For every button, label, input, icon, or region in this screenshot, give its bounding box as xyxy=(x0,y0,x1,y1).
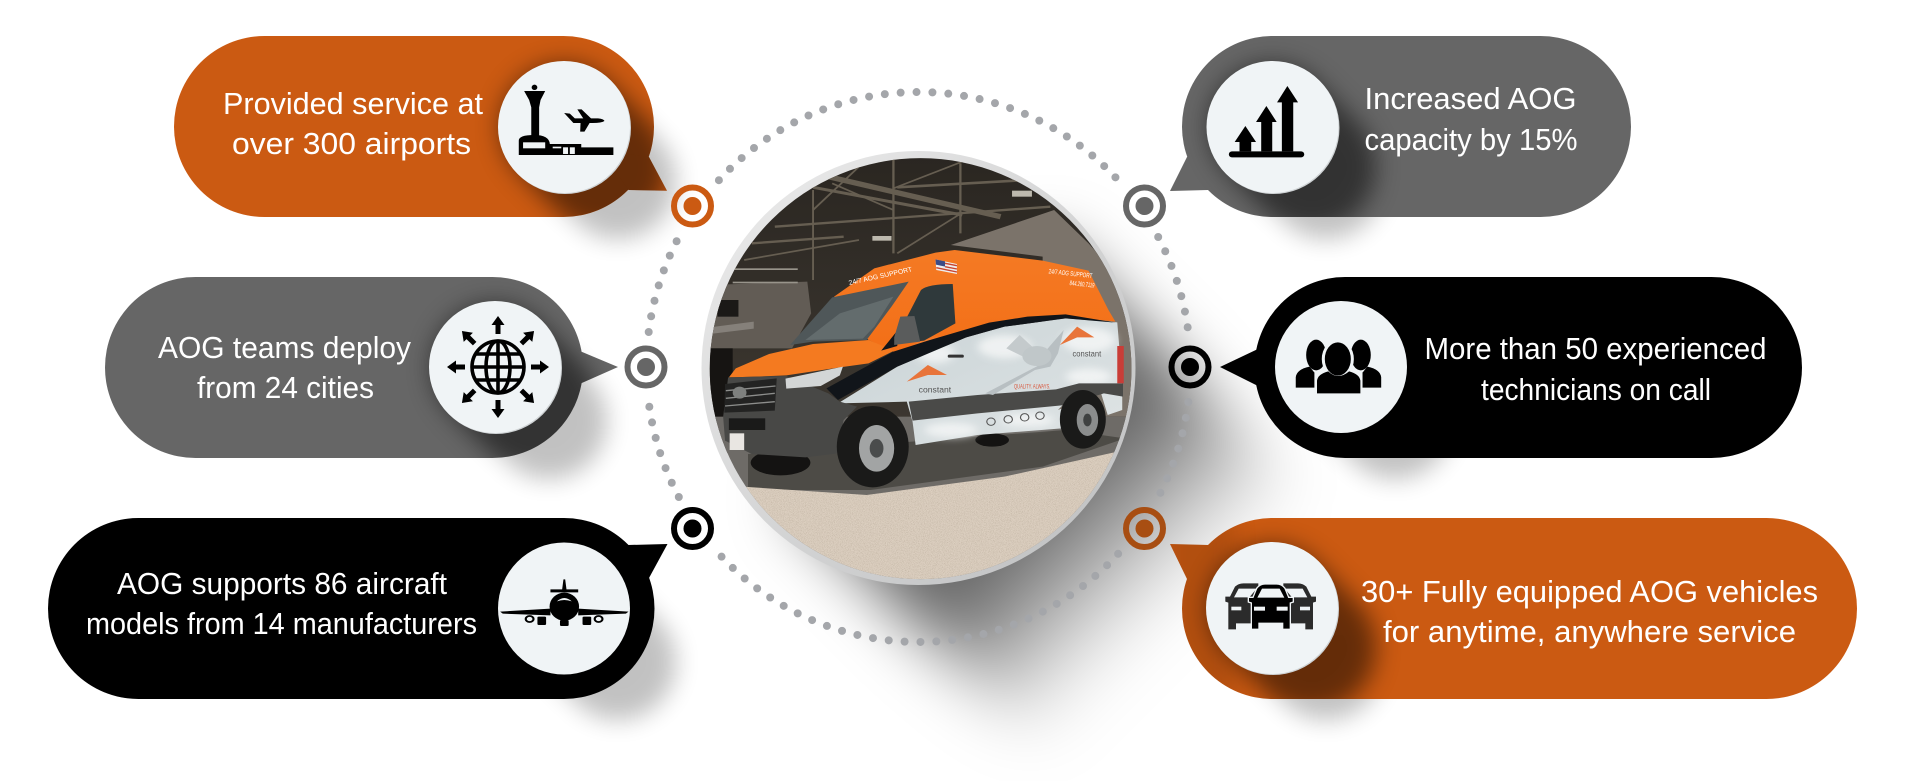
text: cities xyxy=(158,330,411,405)
text: technicians: technicians on call xyxy=(1481,372,1711,407)
cloud-wrapped side panel xyxy=(838,318,1122,445)
icon disc: globe with arrows xyxy=(429,301,562,434)
icon disc: front-view airplane xyxy=(498,542,630,674)
text: vehicles: for anytime, anywhere service xyxy=(1383,614,1796,649)
text: aircraft models: AOG supports 86 aircraft xyxy=(117,566,447,601)
text: technicians xyxy=(1424,331,1766,407)
text: vehicles: 30+ Fully equipped AOG vehicles xyxy=(1361,574,1818,609)
text: capacity xyxy=(1364,81,1578,157)
headlight xyxy=(786,367,843,389)
panel: AOG teams deploy from 24 cities xyxy=(105,277,618,458)
icon disc: rising arrows xyxy=(1206,61,1340,194)
livery: plane, chevrons and tail light xyxy=(907,327,1124,425)
cab windows and mirror xyxy=(881,284,964,358)
long shadow of central photo xyxy=(918,367,1210,659)
far-side wheels xyxy=(751,433,1009,475)
photo frame ring xyxy=(702,151,1136,585)
van lettering: constant xyxy=(919,385,952,395)
van lettering: 24/7 AOG SUPPORT xyxy=(848,266,914,287)
wheels xyxy=(837,390,1106,487)
text: aircraft models xyxy=(86,566,477,641)
icon disc: group of people xyxy=(1275,301,1407,433)
text: vehicles xyxy=(1361,574,1818,649)
panel: 30+ fully equipped AOG vehicles xyxy=(1165,515,1857,700)
target marker: bottom left xyxy=(674,510,711,547)
windshield xyxy=(790,282,909,345)
target marker: middle right xyxy=(1172,348,1208,386)
text: airports xyxy=(223,86,483,161)
panel: more than 50 experienced technicians xyxy=(1220,277,1802,458)
text: technicians: More than 50 experienced xyxy=(1424,331,1766,366)
floor xyxy=(706,417,1138,583)
van orange upper body xyxy=(834,250,1115,352)
van lettering: 24/7 AOG SUPPORT xyxy=(1048,268,1093,280)
target marker: top right xyxy=(1126,188,1163,224)
van lettering: QUALITY. ALWAYS. xyxy=(1014,383,1050,391)
hood xyxy=(729,340,894,377)
grille xyxy=(724,378,777,430)
text: airports: over 300 airports xyxy=(232,126,471,161)
van lettering: constant xyxy=(1072,349,1102,359)
text: cities: from 24 cities xyxy=(197,370,374,405)
target marker: middle left xyxy=(628,348,664,386)
panel: provided service at over 300 airports xyxy=(174,36,667,217)
text: capacity: Increased AOG xyxy=(1364,81,1576,116)
dotted ring around photo xyxy=(649,92,1188,642)
panel: AOG supports 86 aircraft models xyxy=(48,518,668,699)
central photo: van in hangar xyxy=(702,151,1138,585)
cloud texture xyxy=(916,327,1115,437)
hangar background xyxy=(706,153,1138,453)
target marker: top left xyxy=(674,188,711,224)
grey rub strip xyxy=(909,383,1123,421)
outer shadows of the bubbles xyxy=(495,127,1395,662)
text: airports: Provided service at xyxy=(223,86,483,121)
icon disc: three vehicles xyxy=(1206,542,1339,675)
panel: increased AOG capacity by 15% xyxy=(1170,36,1631,217)
text: capacity: capacity by 15% xyxy=(1364,122,1578,157)
icon disc: airport xyxy=(498,61,631,194)
text: aircraft models: models from 14 manufacturers xyxy=(86,606,477,641)
licence plate xyxy=(730,433,744,450)
black swoosh xyxy=(826,314,1115,400)
van lettering xyxy=(848,266,1102,395)
logo: US flag xyxy=(936,259,957,274)
front bumper xyxy=(723,376,857,457)
target marker: bottom right xyxy=(1126,510,1163,547)
text: cities: AOG teams deploy xyxy=(158,330,411,365)
van lettering: 844.260.7119 xyxy=(1069,279,1095,289)
